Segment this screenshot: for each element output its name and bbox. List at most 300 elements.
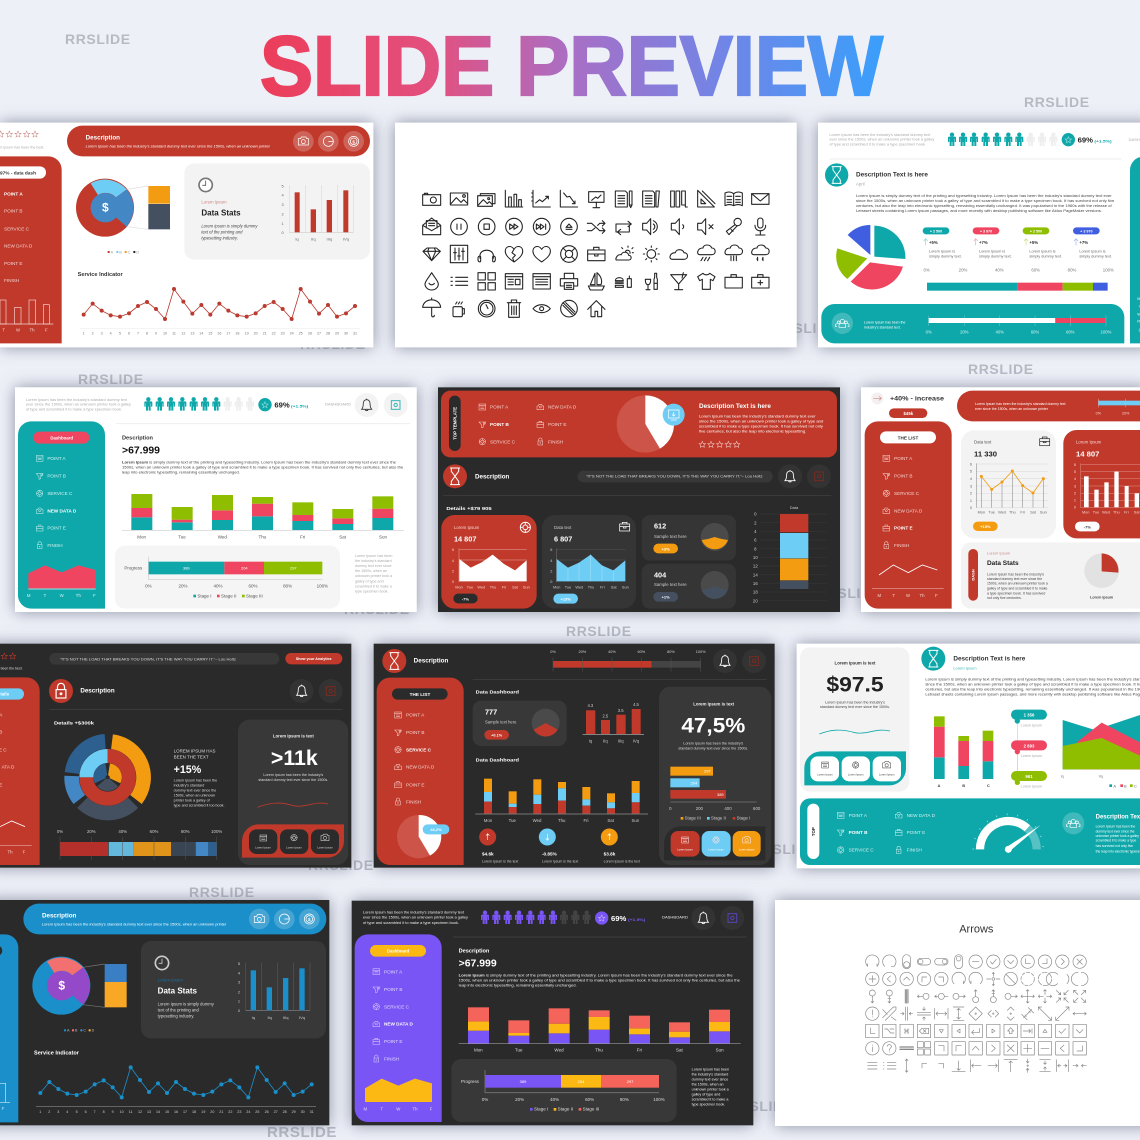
line chart card: Tue: [988, 511, 995, 515]
quarter bar chart: 4.3: [587, 703, 594, 708]
stacked bar chart: Fri: [300, 534, 305, 539]
sidebar: SERVICE C: [894, 491, 920, 496]
service indicator line chart: 6: [128, 332, 130, 336]
panel: slide 3 teal overview: [818, 123, 1140, 347]
quarter bar chart: 4.5: [633, 702, 640, 707]
red area chart card: 14 807: [454, 534, 476, 543]
data stats card: IIIq: [327, 237, 332, 242]
icon: heart: [533, 247, 550, 262]
timeline callouts: [1011, 710, 1047, 789]
bottom teal band: SERVICE C: [849, 848, 874, 853]
side note: the 1500s, when an: [355, 569, 387, 573]
sidebar: THE LIST: [410, 692, 430, 697]
quote pill and button: [49, 653, 342, 665]
icon: toolbox: [588, 247, 605, 261]
stat pills: +5%: [929, 240, 938, 245]
red area chart card: 6: [452, 548, 454, 552]
percent badge: (+1.5%): [628, 917, 646, 922]
icon: first aid kit: [752, 275, 769, 288]
icon: falling chart: [560, 190, 578, 207]
top red banner: NEW DATA D: [548, 405, 577, 410]
sidebar: M: [364, 1106, 368, 1111]
service indicator line chart: 1: [83, 332, 85, 336]
star rating: [0, 131, 38, 137]
top red banner: Description Text is here: [699, 404, 772, 410]
donut chart with breakout: A: [67, 1029, 70, 1033]
line chart card: 6: [970, 462, 972, 466]
watermarks: RRSLIDE: [1024, 94, 1090, 110]
description row: [49, 679, 343, 703]
panel: slide 1 red dashboard: [0, 123, 373, 347]
paragraph: [459, 974, 740, 988]
red bar chart card: Tue: [1093, 511, 1099, 515]
line chart card: Thu: [1009, 511, 1016, 515]
header banner: Description: [86, 135, 120, 141]
data stats card: Lorem Ipsum is simply dummy: [158, 1001, 215, 1006]
stacked percentage bar: 60%: [150, 829, 158, 834]
paragraph: [122, 460, 403, 474]
sidebar: [377, 678, 464, 865]
icon: droplet: [425, 273, 438, 290]
service indicator line chart: 12: [138, 1110, 142, 1114]
stacked bar chart: Mon: [137, 534, 147, 539]
line chart card: +15%: [980, 524, 991, 529]
progress card: 20%: [179, 584, 187, 589]
big percent card: Stage I: [737, 816, 750, 821]
progress card: Stage III: [246, 593, 263, 598]
blue area chart card: Sun: [622, 585, 629, 589]
stat card 404: 404: [654, 570, 667, 579]
description heading: Description: [122, 435, 153, 441]
data stats card: IIq: [311, 237, 316, 242]
big number card: Lorem Ipsum has been the industry's: [263, 773, 323, 777]
sidebar: [865, 421, 952, 609]
blue area chart card: Thu: [588, 585, 594, 589]
icon: blocked circle: [561, 300, 577, 317]
stacked column data chart: 6: [754, 538, 757, 543]
service indicator line chart: 23: [281, 332, 285, 336]
icon: sailboat: [588, 273, 604, 290]
icon: eye: [533, 305, 550, 313]
intro text: of type and scrambled it to make a type specimen book.: [363, 921, 459, 925]
description row: Description: [414, 659, 449, 665]
big value card: Lorem Ipsum: [879, 773, 895, 777]
side note: [355, 554, 393, 593]
line chart card: Wed: [998, 511, 1006, 515]
side note: scrambled it to make a: [692, 1098, 729, 1102]
stacked bar chart: Thu: [595, 1048, 603, 1053]
big value card: Lorem Ipsum: [848, 773, 864, 777]
stacked bar chart: [459, 1007, 741, 1053]
icon: window panel: [505, 274, 523, 289]
data stats card: Data Stats: [201, 208, 241, 217]
bottom teal band: industry's standard text.: [864, 325, 901, 329]
progress card: 204: [241, 566, 248, 571]
icon: skip forward: [533, 218, 550, 235]
star rating: [1, 653, 16, 659]
sidebar: Dashboard: [50, 435, 73, 440]
description heading: >67.999: [122, 445, 160, 456]
stacked percentage bar: [57, 829, 222, 860]
row 5: ⌘: [903, 1027, 910, 1035]
line chart card: [961, 430, 1056, 538]
stacked percentage bar: 100%: [211, 829, 222, 834]
icon: rising chart: [532, 190, 550, 207]
side note: unknown printer took a: [355, 574, 393, 578]
progress card: Stage I: [534, 1107, 548, 1112]
stat card 404: Sample text here: [654, 582, 687, 587]
icon: lifebuoy: [561, 246, 577, 262]
stacked bar chart: Thu: [258, 534, 267, 539]
line chart card: 1: [970, 499, 972, 503]
sidebar: W: [906, 593, 911, 598]
blue area chart card: Mon: [553, 585, 560, 589]
red area chart card: Lorem Ipsum: [454, 525, 480, 530]
icon: repeat: [616, 221, 631, 235]
stacked weekly bars: Tue: [509, 818, 517, 823]
sidebar: F: [2, 1106, 5, 1111]
big percent card: 400: [724, 806, 732, 811]
paragraph: Letraset sheets containing Lorem Ipsum passages, and more recently with desktop publishing software like Aldus PageMaker versions.: [856, 209, 1102, 213]
icon: trash: [507, 300, 521, 317]
intro text: of type and scrambled it to make a type specimen book.: [26, 408, 122, 412]
red bar chart card: Sat: [1134, 511, 1140, 515]
stat card 404: [642, 564, 736, 609]
service indicator line chart: 17: [183, 1110, 187, 1114]
panel: slide 5 dark red dashboard: [438, 387, 840, 612]
progress card: 60%: [585, 1097, 594, 1102]
sidebar: M: [27, 593, 31, 598]
service indicator line chart: 27: [274, 1110, 278, 1114]
icon: stage microphone: [755, 218, 766, 235]
sidebar: SERVICE C: [4, 226, 30, 231]
red bar chart card: 6: [1074, 463, 1076, 467]
kpi row: Lorem Ipsum is the text: [542, 859, 578, 863]
stacked bars abc: C: [987, 783, 990, 788]
icon: martini: [671, 273, 687, 290]
bottom teal band: [821, 304, 1124, 343]
top red banner: [957, 391, 1140, 421]
icon: fast forward: [506, 218, 522, 235]
stacked bar chart: Wed: [554, 1048, 564, 1053]
stacked bars abc: [934, 716, 993, 788]
watermarks: RRSLIDE: [65, 31, 131, 47]
top red banner: 20%: [1122, 411, 1130, 415]
sidebar: Th: [7, 849, 13, 854]
service indicator line chart: 18: [235, 332, 239, 336]
big percent card: 600: [753, 806, 761, 811]
icon: presentation board: [589, 192, 604, 208]
stat pills: Lorem Ipsum is: [1029, 250, 1056, 254]
icon: pictures: [478, 194, 495, 206]
data stats card: standard dummy text ever since the: [987, 577, 1042, 581]
stacked column data chart: 20: [753, 598, 758, 603]
dashboard buttons: [325, 393, 408, 417]
intro text: Lorem Ipsum has been the industry's standard dummy text: [26, 398, 127, 402]
line chart card: 4: [970, 477, 973, 481]
icon: t-shirt: [698, 273, 715, 289]
stat pills: +7%: [1079, 240, 1088, 245]
data stats card: 3: [282, 202, 285, 207]
sidebar: POINT E: [4, 261, 23, 266]
stacked column data chart: Data: [790, 505, 799, 510]
area chart: C: [1134, 783, 1137, 788]
service indicator line chart: 7: [94, 1110, 96, 1114]
stacked percentage bar: 0%: [57, 829, 63, 834]
stat pills: + 3 970: [980, 229, 992, 233]
stat pills: +5%: [1029, 240, 1038, 245]
donut chart with breakout: C: [83, 1029, 86, 1033]
data stats card: DASH: [970, 569, 975, 581]
sidebar: POINT B: [384, 987, 403, 992]
description row: "IT'S NOT THE LOAD THAT BREAKS YOU DOWN, IT'S THE WAY YOU CARRY IT."– Lou Holtz: [586, 475, 763, 479]
stacked weekly bars: Sat: [607, 818, 615, 823]
service indicator line chart: 15: [208, 332, 212, 336]
stacked bars abc: B: [962, 783, 965, 788]
icon: window text: [533, 274, 550, 289]
icon: shuffle: [587, 221, 605, 233]
bottom teal band: unknown printer took a galley: [1096, 834, 1139, 838]
big number card: >11k: [271, 746, 318, 770]
stacked bar chart: Mon: [474, 1048, 483, 1053]
progress card: [451, 1059, 677, 1122]
side note: Lorem Ipsum has been: [355, 554, 392, 558]
side note: the 1500s, when an: [692, 1082, 724, 1086]
service indicator line chart: 31: [310, 1110, 314, 1114]
details heading: Details +$300k: [54, 720, 94, 726]
stat card 612: [642, 515, 736, 561]
stat pills: simply dummy text.: [929, 254, 962, 258]
sidebar: W: [60, 593, 65, 598]
stat card 612: +3%: [662, 546, 670, 551]
stat pills: [923, 227, 1112, 258]
red bar chart card: Mon: [1082, 511, 1089, 515]
header banner: $: [352, 139, 355, 144]
icon: pause: [451, 218, 467, 235]
service indicator line chart: 13: [147, 1110, 151, 1114]
big value card: standard dummy text ever since the 1500s.: [820, 705, 890, 709]
icon: broken heart: [505, 247, 523, 262]
stacked percentage bar: 20%: [959, 267, 967, 272]
sidebar: Dashboard: [387, 949, 410, 954]
icon: cloud with slanted rain: [698, 245, 715, 261]
progress card: 297: [290, 566, 297, 571]
panel: slide 2 icon set: [395, 123, 797, 347]
watermarks: RRSLIDE: [566, 623, 632, 639]
row 4: [866, 1007, 1086, 1020]
stacked weekly bars: Thu: [558, 818, 566, 823]
intro text: [26, 398, 131, 412]
service indicator line chart: 12: [181, 332, 185, 336]
big number card: Lorem Ipsum: [255, 845, 272, 849]
data stats card: IVq: [299, 1015, 305, 1020]
panel: slide 11 dark purple dashboard: [352, 901, 753, 1125]
red area chart card: Thu: [490, 585, 496, 589]
icon: envelope: [752, 194, 769, 204]
bottom teal band: 20%: [960, 329, 969, 334]
service indicator line chart: 17: [226, 332, 230, 336]
increase badge: +40% - increase: [890, 396, 944, 403]
line chart card: Mon: [978, 511, 985, 515]
notification buttons: [713, 649, 766, 673]
service indicator line chart: 29: [335, 332, 339, 336]
paragraph: centuries, but also the leap into electronic typesetting, remaining essentially unchanged. It was popularised in the 1960s with the release of: [856, 204, 1113, 208]
sidebar: POINT B: [4, 209, 23, 214]
stacked column data chart: 2: [754, 520, 757, 525]
big percent card: 0: [669, 806, 672, 811]
header banner: Description: [42, 913, 77, 919]
red bar chart card: Wed: [1102, 511, 1110, 515]
big percent card: [659, 687, 771, 865]
description heading: [459, 948, 497, 970]
service indicator line chart: [78, 272, 360, 336]
watermarks: RRSLIDE: [772, 320, 838, 336]
service indicator line chart: 22: [228, 1110, 232, 1114]
bottom teal band: 40%: [996, 329, 1004, 334]
stat pills: + 2 500: [930, 229, 942, 233]
panel: slide 4 teal dashboard: [15, 387, 417, 612]
line chart card: Sat: [1030, 511, 1037, 515]
sidebar: NEW DATA D: [384, 1022, 414, 1027]
stacked column data chart: 12: [753, 564, 758, 569]
stat card 777: 777: [485, 708, 497, 717]
red area chart card: Wed: [477, 585, 485, 589]
big percent card: Lorem Ipsum: [677, 847, 694, 851]
sidebar: Th: [76, 593, 81, 598]
arrow icon grid: [866, 955, 1088, 1072]
watermarks: RRSLIDE: [308, 857, 374, 873]
bottom teal band: 60%: [1031, 329, 1039, 334]
blue area chart card: Tue: [565, 585, 571, 589]
progress card: 60%: [249, 584, 257, 589]
red area chart card: 2: [452, 569, 454, 573]
icon: open book: [725, 192, 742, 206]
area chart: [1061, 715, 1140, 788]
row 3: [869, 990, 1086, 1003]
stacked column data chart: 16: [753, 581, 758, 586]
stacked column data chart: 4: [754, 529, 757, 534]
progress card: 204: [578, 1079, 585, 1084]
timeline callouts: Lorem Ipsum: [1021, 754, 1042, 758]
increase badge: [871, 392, 944, 418]
blue area chart card: Fri: [600, 585, 605, 589]
kpi row: Lorem Ipsum is the text: [604, 859, 640, 863]
sidebar: T: [380, 1106, 383, 1111]
line chart card: Fri: [1020, 511, 1025, 515]
data stats card: [961, 542, 1140, 609]
sidebar: FINISH: [4, 278, 19, 283]
icon: cloud with drops: [752, 245, 769, 261]
service indicator line chart: 24: [290, 332, 294, 336]
sidebar: FINISH: [384, 1056, 399, 1061]
donut commentary: Lorem Ipsum has been the: [174, 779, 217, 783]
data stats card: 2: [238, 989, 241, 994]
stat card 777: [473, 701, 567, 746]
sidebar: NEW DATA D: [47, 508, 77, 513]
stacked column data chart: 18: [753, 590, 758, 595]
data stats card: typesetting industry.: [158, 1013, 194, 1018]
donut chart with breakout: $: [58, 979, 65, 993]
stat card 777: +0.1%: [491, 733, 503, 737]
line chart card: 2: [970, 492, 972, 496]
donut chart with breakout: $: [102, 201, 109, 215]
service indicator line chart: 11: [129, 1110, 133, 1114]
big percent card: 200: [696, 806, 704, 811]
stat card 777: Sample text here: [485, 720, 517, 725]
right teal panel: [1130, 157, 1140, 343]
kpi row: $4.6k: [482, 851, 494, 856]
panel: slide 6 red white dashboard: [861, 387, 1140, 612]
stacked percentage bar: 100%: [1103, 267, 1114, 272]
red bar chart card: 4: [1074, 477, 1077, 481]
icon: list: [451, 277, 468, 285]
sidebar: ATA D: [2, 764, 15, 769]
stacked bar chart: Tue: [515, 1048, 523, 1053]
description heading: [122, 436, 160, 454]
heading: Lorem Ipsum: [953, 666, 977, 671]
sidebar: NEW DATA D: [406, 765, 435, 770]
red bar chart card: Thu: [1113, 511, 1120, 515]
icon grid: [423, 190, 769, 317]
data stats card: IIIq: [283, 1015, 288, 1020]
timeline callouts: Lorem Ipsum: [1021, 785, 1042, 789]
side note: unknown printer took a: [692, 1087, 730, 1091]
intro text: ever since the 1500s, when an unknown printer took a galley: [363, 916, 468, 920]
service indicator line chart: 24: [246, 1110, 250, 1114]
multi ring donut: [72, 741, 144, 813]
data stats card: Lorem Ipsum: [201, 199, 227, 204]
blue area chart card: 0: [550, 580, 552, 584]
stacked bar chart: Sat: [676, 1048, 683, 1053]
service indicator line chart: 5: [119, 332, 121, 336]
big value card: $97.5: [826, 673, 884, 697]
blue area chart card: Sat: [611, 585, 617, 589]
stacked weekly bars: [475, 779, 648, 823]
panel: slide 10 dark blue dashboard: [0, 900, 329, 1125]
icon: suitcase: [725, 275, 742, 288]
service indicator line chart: 30: [301, 1110, 305, 1114]
service indicator line chart: 25: [255, 1110, 259, 1114]
quarter bar chart: IIIq: [618, 739, 624, 744]
stat pills: simply dummy text.: [1029, 254, 1062, 258]
data stats card: 1500s, when an unknown printer took a: [987, 582, 1048, 586]
people pictogram: [481, 910, 591, 924]
big percent card: Stage II: [711, 816, 726, 821]
service indicator line chart: 4: [66, 1110, 68, 1114]
top red banner: POINT E: [548, 422, 567, 427]
donut chart with breakout: C: [128, 250, 131, 254]
service indicator line chart: 16: [217, 332, 221, 336]
paragraph: leap into electronic typesetting, remaining essentially unchanged.: [122, 470, 240, 474]
service indicator line chart: 26: [308, 332, 312, 336]
donut commentary: 1500s, when an unknown: [174, 794, 215, 798]
sidebar: POINT E: [47, 526, 66, 531]
data stats card: galley of type and scrambled it to make: [987, 587, 1047, 591]
icon: speaker loud: [643, 219, 657, 235]
stacked weekly bars: Fri: [583, 818, 589, 823]
icon: gauge: [478, 300, 495, 317]
intro text: ever since the 1500s, when an unknown printer took a galley: [26, 403, 131, 407]
sidebar: POINT A: [47, 456, 67, 461]
percent badge: [1062, 133, 1140, 146]
description row: [382, 649, 449, 673]
watermarks: RRSLIDE: [300, 336, 366, 352]
people pictogram: [144, 397, 254, 411]
top red banner: SERVICE C: [490, 439, 516, 444]
icon: umbrella: [423, 298, 441, 317]
service indicator line chart: 27: [317, 332, 321, 336]
row 7: [868, 1059, 1086, 1072]
